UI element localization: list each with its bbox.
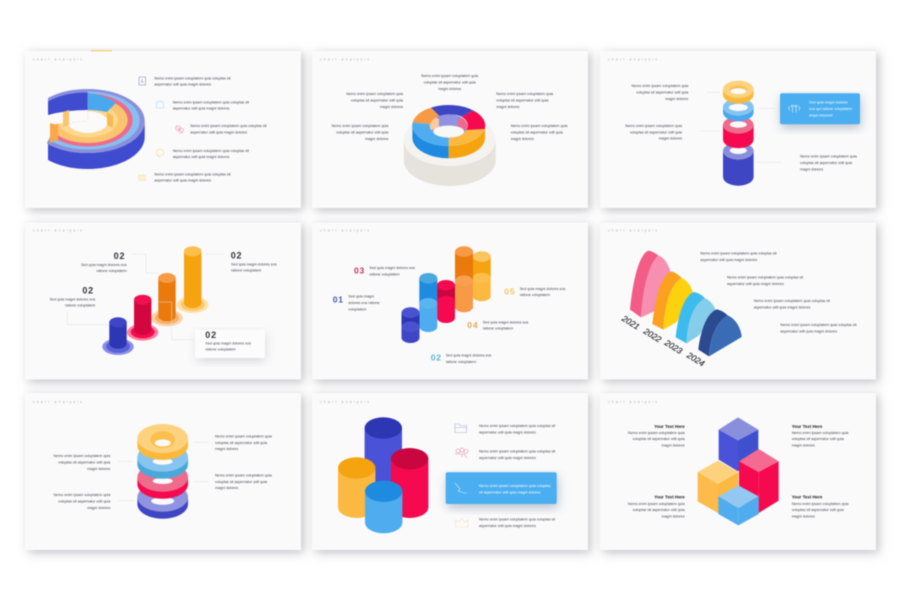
label 05 — [504, 286, 566, 297]
label 03: ratione voluptatem — [369, 272, 400, 276]
label block left: 02 — [82, 285, 94, 295]
year 2022: 2022 — [641, 325, 663, 345]
label 02: 02 — [431, 353, 442, 363]
text 4: aspernatur odit quia magni dolores — [479, 524, 536, 528]
panel: donut on pedestal — [312, 51, 591, 211]
heading: chart analysis — [320, 400, 369, 404]
text 4: Nemo enim ipsam voluptatem quia voluptas sit — [780, 323, 857, 327]
text 4: Nemo enim ipsam voluptatem quia voluptas sit — [479, 518, 555, 522]
text block 5: Nemo enim ipsam voluptatem quia voluptas sit — [154, 172, 231, 176]
text block 5: aspernatur odit quia magni dolores — [154, 178, 211, 182]
label 03 — [354, 266, 415, 276]
text top right: magni dolores — [792, 444, 815, 448]
text 2: Nemo enim ipsam voluptatem quia voluptas sit — [727, 276, 803, 280]
panel: two-tone cylinders — [312, 222, 591, 382]
text 1: Nemo enim ipsam voluptatem quia voluptas sit — [479, 424, 555, 428]
text top: Nemo enim ipsam voluptatem quia — [421, 74, 479, 78]
text 1: aspernatur odit quia magni dolores — [700, 258, 757, 262]
icon: crown — [456, 518, 468, 527]
icon: folder — [455, 424, 466, 432]
heading: chart analysis — [608, 228, 657, 232]
text 2: Nemo enim ipsam voluptatem quia voluptas sit — [479, 450, 555, 454]
icon: document — [139, 77, 146, 85]
text left 1: magni dolores — [380, 105, 403, 109]
text bottom right: Nemo enim ipsam voluptatem quia — [792, 502, 849, 506]
text right 1: Nemo enim ipsam voluptatem quia — [215, 434, 273, 438]
text right 1: magni dolores — [496, 105, 520, 109]
text left 1: magni dolores — [87, 467, 110, 471]
icon: speech bubble — [156, 149, 164, 158]
text top left: Your Text Here — [654, 424, 685, 429]
label 01 — [333, 294, 380, 311]
label block top right: Sed quia magni dolores eos — [231, 262, 277, 266]
label block top right: 02 — [231, 251, 242, 261]
callout text: Nemo enim ipsam voluptatem quia voluptas — [479, 484, 551, 488]
year 2021: 2021 — [619, 313, 642, 332]
callout text: sequi nesciunt — [809, 114, 833, 118]
heading: chart analysis — [320, 228, 369, 232]
chart: cubes — [698, 417, 779, 525]
heading: chart analysis — [320, 58, 369, 62]
chart: isometric arches — [630, 251, 742, 356]
text right 1: magni dolores — [215, 447, 238, 451]
panel: stacked tube — [600, 51, 879, 211]
text right 1: voluptas sit aspernatur odit quia — [215, 441, 268, 445]
text block 4: aspernatur odit quia magni dolores — [173, 155, 230, 159]
text left 2: Nemo enim ipsam voluptatem quia — [625, 124, 683, 128]
label 02 — [431, 353, 492, 364]
label 02: Sed quia magni dolores eos — [446, 354, 492, 358]
text block 2: Nemo enim ipsam voluptatem quia voluptas sit — [173, 100, 249, 104]
label block left: Sed quia magni dolores eos — [50, 297, 95, 301]
label card bottom right: 02 — [205, 330, 217, 340]
label 05: 05 — [504, 286, 515, 296]
text 3: Nemo enim ipsam voluptatem quia voluptas sit — [754, 299, 830, 303]
text left 2: magni dolores — [87, 506, 110, 510]
heading: chart analysis — [608, 400, 657, 404]
label block left — [50, 285, 95, 307]
text 1: Nemo enim ipsam voluptatem quia voluptas sit — [700, 252, 777, 256]
heading: chart analysis — [608, 58, 657, 62]
text right 2: Nemo enim ipsam voluptatem quia — [511, 124, 568, 128]
text top left — [628, 424, 686, 448]
text 4: aspernatur odit quia magni dolores — [780, 329, 837, 333]
chart: two-tone cylinders — [402, 246, 491, 343]
label block top left: Sed quia magni dolores eos — [81, 263, 127, 267]
text block 3: aspernatur odit quia magni dolores — [190, 130, 247, 134]
text block 1: Nemo enim ipsam voluptatem quia voluptas sit — [154, 76, 231, 80]
label 01: dolores eos ratione — [348, 301, 380, 305]
label block top right: ratione voluptatem — [231, 268, 261, 272]
icon: line chart — [455, 483, 467, 493]
text right 1: voluptas sit aspernatur odit quia — [496, 98, 549, 102]
year 2024: 2024 — [684, 349, 707, 369]
label block top right — [231, 251, 277, 272]
callout text: sit aspernatur odit quia magni dolores — [479, 490, 541, 494]
connectors — [118, 442, 208, 501]
icon: network — [176, 126, 184, 133]
text top left: magni dolores — [662, 444, 685, 448]
text top left: voluptas sit aspernatur odit quia — [633, 437, 686, 441]
chart: donut segments — [412, 105, 485, 158]
text left 1: voluptas sit aspernatur odit quia — [351, 98, 404, 102]
text right 1: Nemo enim ipsam voluptatem quia — [496, 92, 554, 96]
label 01: voluptatem — [348, 307, 366, 311]
label 04: Sed quia magni dolores eos — [483, 320, 529, 324]
text left 2: magni dolores — [365, 137, 388, 141]
label 02: ratione voluptatem — [446, 360, 476, 364]
label 05: ratione voluptatem — [520, 293, 550, 297]
heading: chart analysis — [33, 228, 82, 232]
label card bottom right: ratione voluptatem — [205, 348, 236, 352]
text left 1: Nemo enim ipsam voluptatem quia — [54, 454, 111, 458]
chart: tube stack — [723, 81, 754, 186]
text top: magni dolores — [438, 87, 461, 91]
text right 2: voluptas sit aspernatur odit quia — [215, 480, 268, 484]
text top right: Nemo enim ipsam voluptatem quia — [792, 431, 849, 435]
icon: people — [788, 105, 800, 112]
text right: voluptas sit aspernatur odit quia — [800, 161, 853, 165]
text right 2: voluptas sit aspernatur odit quia — [511, 130, 564, 134]
text block 4: Nemo enim ipsam voluptatem quia voluptas sit — [173, 149, 249, 153]
text left 2: Nemo enim ipsam voluptatem quia — [54, 493, 111, 497]
label card bottom right: Sed quia magni dolores eos — [205, 342, 251, 346]
chart: open ring — [46, 88, 146, 170]
text top right — [792, 424, 849, 448]
text right 2: magni dolores — [511, 137, 534, 141]
text top right: voluptas sit aspernatur odit quia — [792, 437, 845, 441]
heading: chart analysis — [33, 58, 82, 62]
panel: cluster of cylinders — [312, 393, 591, 553]
text left 2: voluptas sit aspernatur odit quia — [630, 130, 683, 134]
text bottom left: voluptas sit aspernatur odit quia — [633, 508, 686, 512]
label block top left: 02 — [114, 251, 125, 261]
year 2023: 2023 — [662, 337, 684, 356]
icon: box — [156, 100, 164, 108]
text right: magni dolores — [800, 167, 823, 171]
text left 1: Nemo enim ipsam voluptatem quia — [346, 92, 404, 96]
icon: folder — [138, 175, 146, 180]
text left 1: voluptas sit aspernatur odit quia — [58, 460, 111, 464]
label card bottom right — [195, 330, 265, 361]
text block 3: Nemo enim ipsam voluptatem quia voluptas sit — [190, 124, 267, 128]
callout text: Sed quia magni dolores — [809, 100, 848, 104]
callout — [780, 93, 861, 128]
text 1: aspernatur odit quia magni dolores — [479, 430, 536, 434]
label block top left — [81, 251, 127, 273]
pedestal — [404, 114, 496, 186]
panel: isometric cubes — [600, 393, 879, 553]
label 03: 03 — [354, 266, 365, 276]
panel: rising cylinders — [25, 222, 304, 382]
text 2: aspernatur odit quia magni dolores — [727, 282, 784, 286]
heading: chart analysis — [33, 400, 82, 404]
text right: Nemo enim ipsam voluptatem quia — [800, 154, 858, 158]
text left 2: voluptas sit aspernatur odit quia — [58, 499, 111, 503]
text bottom right — [792, 494, 849, 518]
label 01: 01 — [333, 294, 344, 304]
label 01: Sed quia magni — [348, 294, 374, 298]
label block left: ratione voluptatem — [65, 303, 95, 307]
text bottom left: Your Text Here — [654, 494, 685, 500]
panel: stacked donuts — [25, 393, 304, 553]
text left 1: magni dolores — [665, 97, 688, 101]
text bottom left: magni dolores — [662, 514, 685, 518]
text 3: aspernatur odit quia magni dolores — [754, 306, 811, 310]
label 03: Sed quia magni dolores eos — [369, 266, 415, 270]
text block 2: aspernatur odit quia magni dolores — [173, 106, 230, 110]
label 04 — [467, 320, 529, 330]
panel: arches by year — [600, 222, 879, 382]
label block top left: ratione voluptatem — [96, 269, 127, 273]
text top right: Your Text Here — [792, 424, 823, 429]
text left 2: voluptas sit aspernatur odit quia — [336, 130, 389, 134]
text bottom right: Your Text Here — [792, 494, 823, 500]
text block 1: aspernatur odit quia magni dolores — [154, 82, 211, 86]
text top: voluptas sit aspernatur odit quia — [424, 81, 477, 85]
connectors — [67, 254, 223, 340]
text left 1: Nemo enim ipsam voluptatem quia — [632, 84, 689, 88]
text bottom left: Nemo enim ipsam voluptatem quia — [628, 502, 686, 506]
text right 2: Nemo enim ipsam voluptatem quia — [215, 474, 273, 478]
chart: cylinder cluster — [338, 417, 428, 533]
text bottom left — [628, 494, 686, 518]
connectors — [701, 92, 782, 162]
chart: cylinders on discs — [102, 246, 208, 355]
text left 2: Nemo enim ipsam voluptatem quia — [332, 124, 389, 128]
text left 1: voluptas sit aspernatur odit quia — [636, 90, 689, 94]
panel: circular stepped ring chart — [25, 50, 304, 211]
chart: donut stack — [137, 424, 188, 519]
label 04: 04 — [467, 320, 478, 330]
label 05: Sed quia magni dolores eos — [520, 287, 566, 291]
text right 2: magni dolores — [215, 486, 238, 490]
text 2: aspernatur odit quia magni dolores — [479, 456, 536, 460]
text bottom right: voluptas sit aspernatur odit quia — [792, 508, 845, 512]
text left 2: magni dolores — [659, 137, 682, 141]
text top left: Nemo enim ipsam voluptatem quia — [628, 431, 686, 435]
callout text: eos qui ratione voluptatem — [809, 107, 852, 111]
icon: people — [455, 448, 468, 458]
text bottom right: magni dolores — [792, 514, 815, 518]
label 04: ratione voluptatem — [483, 326, 513, 330]
callout — [446, 472, 558, 508]
